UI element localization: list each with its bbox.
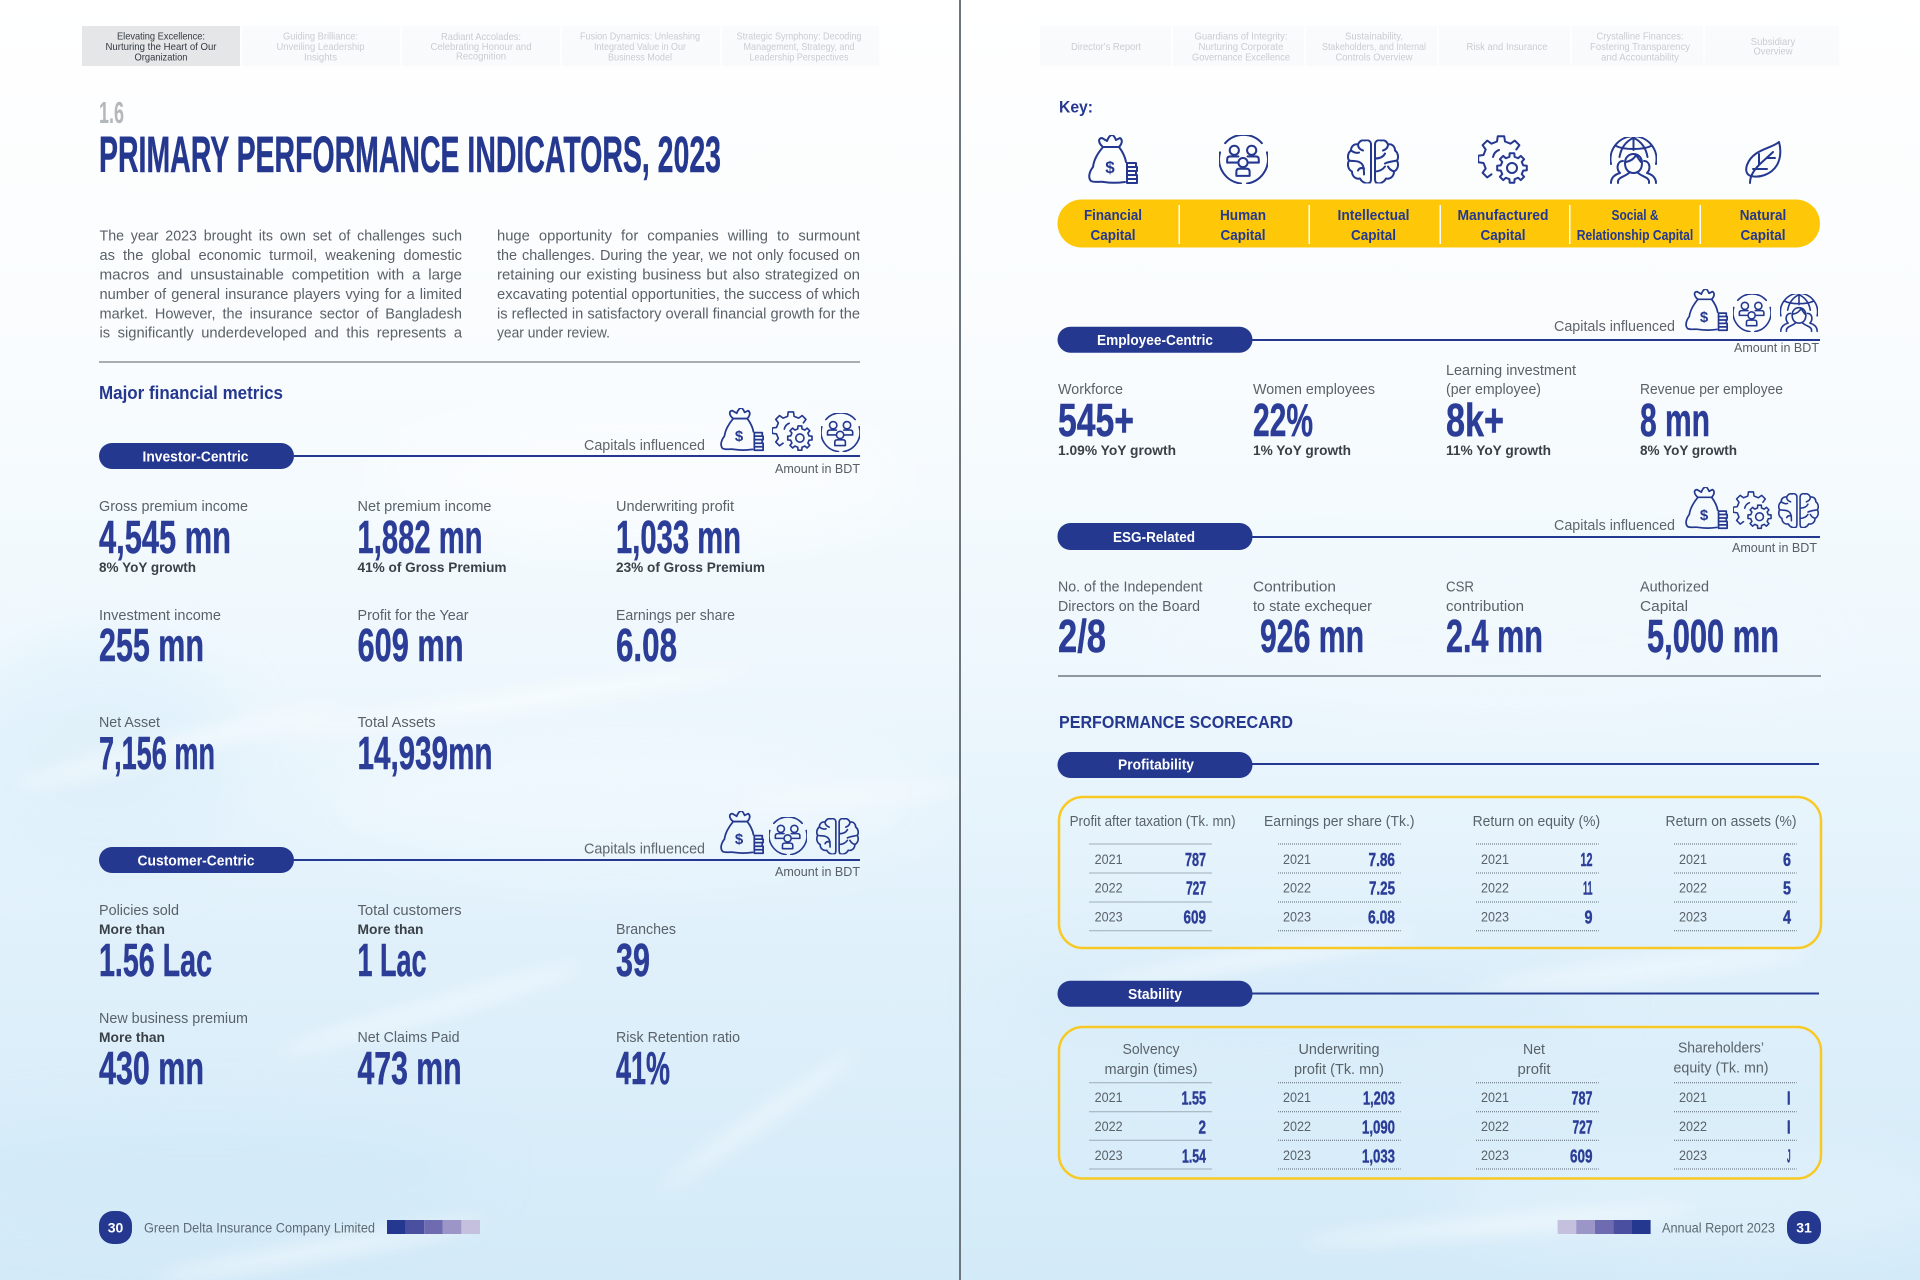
table: profit after taxation	[1070, 814, 1236, 931]
table: return on assets: 2023	[1679, 909, 1707, 924]
metric: investment income: Investment income	[99, 608, 221, 624]
navigation tabs: left page: Recognition	[456, 50, 506, 62]
metric: contribution to state exchequer	[1253, 580, 1372, 662]
metric: women employees	[1253, 382, 1375, 458]
navigation tabs: right page: and Accountability	[1601, 52, 1680, 64]
metrics: esg-related	[1058, 580, 1779, 662]
metric: independent directors: 2/8	[1058, 610, 1106, 662]
table: shareholders equity: I	[1787, 1088, 1790, 1108]
table: underwriting profit: 2023	[1283, 1148, 1311, 1163]
metric: contribution to state exchequer: 926 mn	[1260, 610, 1364, 662]
navigation tabs: left page: Radiant Accolades:	[441, 31, 521, 43]
metrics: employee-centric	[1058, 363, 1783, 458]
table: shareholders equity: Shareholders’	[1678, 1041, 1764, 1057]
metric: workforce	[1058, 382, 1176, 458]
metric: earnings per share	[616, 608, 735, 671]
legend: yellow capitals bar: Manufactured	[1458, 207, 1548, 224]
table: return on assets: 5	[1783, 879, 1791, 899]
navigation tabs: left page	[82, 26, 879, 66]
table: underwriting profit: 2022	[1283, 1119, 1311, 1134]
metric: net claims paid: 473 mn	[358, 1042, 462, 1094]
section header: esg-related: ESG-Related	[1113, 530, 1195, 546]
section header: employee-centric: Employee-Centric	[1097, 333, 1213, 349]
metric: csr contribution: contribution	[1446, 599, 1524, 615]
section header: stability	[1058, 981, 1819, 1007]
metric: revenue per employee: 8% YoY growth	[1640, 442, 1737, 458]
icon: social capital	[1780, 293, 1818, 331]
centre fold line	[959, 0, 961, 1280]
table: underwriting profit: 1,090	[1362, 1117, 1395, 1137]
metric: net premium income: Net premium income	[358, 499, 492, 515]
metric: authorized capital: 5,000 mn	[1647, 610, 1779, 662]
text block: introduction right column	[497, 228, 861, 342]
table: solvency margin: 2021	[1095, 1090, 1123, 1105]
metric: risk retention ratio	[616, 1030, 740, 1094]
metric: contribution to state exchequer: to state exchequer	[1253, 599, 1372, 615]
table: shareholders equity: 2022	[1679, 1119, 1707, 1134]
metric: net claims paid	[358, 1030, 462, 1094]
icon: manufactured capital	[1733, 492, 1771, 528]
navigation tabs: right page: Stakeholders, and Internal	[1322, 41, 1426, 53]
footer: left page: 30	[108, 1220, 123, 1236]
icon: financial capital	[721, 811, 763, 853]
table: return on assets: 4	[1783, 907, 1791, 927]
table: shareholders equity: 2021	[1679, 1090, 1707, 1105]
metric: learning investment: Learning investment	[1446, 363, 1576, 379]
table: net profit: 727	[1572, 1117, 1592, 1137]
metric: total assets: 14,939mn	[358, 727, 492, 779]
legend: yellow capitals bar: Intellectual	[1338, 207, 1410, 224]
table: profit after taxation: 2022	[1095, 881, 1123, 896]
icon: financial capital	[1686, 289, 1727, 330]
metric: total customers	[358, 903, 462, 986]
heading: key: Key:	[1059, 98, 1093, 117]
icon: financial capital: $	[1700, 309, 1709, 326]
navigation tabs: right page: Risk and Insurance	[1466, 41, 1548, 53]
section header: profitability	[1058, 752, 1819, 778]
text block: introduction right column: huge opportunity for companies willing to surmount	[497, 228, 861, 245]
panel: profitability scorecard	[1059, 797, 1821, 948]
section header: stability: Stability	[1128, 987, 1182, 1003]
navigation tabs: left page: Leadership Perspectives	[750, 52, 848, 64]
metric: profit for the year: Profit for the Year	[358, 608, 469, 624]
metric: underwriting profit: 23% of Gross Premium	[616, 559, 765, 575]
metric: earnings per share: 6.08	[616, 619, 677, 671]
icon: financial capital: $	[735, 831, 744, 848]
table: profit after taxation: Profit after taxation (Tk. mn)	[1070, 814, 1236, 830]
table: shareholders equity: equity (Tk. mn)	[1674, 1061, 1768, 1077]
title: PRIMARY PERFORMANCE INDICATORS, 2023	[99, 126, 721, 183]
table: net profit	[1476, 1042, 1599, 1169]
table: earnings per share: 2022	[1283, 881, 1311, 896]
legend: yellow capitals bar: Financial	[1084, 207, 1142, 224]
metric: revenue per employee	[1640, 382, 1783, 458]
legend: yellow capitals bar: Capital	[1351, 227, 1396, 244]
table: earnings per share: 7.86	[1368, 850, 1395, 870]
metric: gross premium income: Gross premium income	[99, 499, 248, 515]
metrics: investor-centric	[99, 499, 765, 779]
metric: workforce: Workforce	[1058, 382, 1123, 398]
metrics: customer-centric	[99, 903, 740, 1094]
navigation tabs: left page: Nurturing the Heart of Our	[106, 41, 217, 53]
navigation tabs: left page: Unveiling Leadership	[276, 41, 365, 53]
table: earnings per share: 6.08	[1368, 907, 1395, 927]
navigation tabs: left page: Organization	[134, 52, 188, 64]
table: net profit: 787	[1572, 1088, 1592, 1108]
icon: intellectual capital	[1779, 494, 1818, 528]
icon: financial capital: $	[735, 428, 744, 445]
metric: authorized capital: Authorized	[1640, 580, 1709, 596]
metric: risk retention ratio: Risk Retention ratio	[616, 1030, 740, 1046]
text block: introduction right column: is reflected in satisfactory overall financial growth for the	[497, 305, 860, 322]
table: return on equity: 11	[1583, 879, 1592, 899]
table: net profit: 2021	[1481, 1090, 1509, 1105]
icon: financial capital	[1686, 487, 1727, 528]
legend: yellow capitals bar: Capital	[1220, 227, 1266, 244]
navigation tabs: right page: Director's Report	[1071, 41, 1141, 53]
icon: financial capital	[1089, 135, 1137, 183]
metric: learning investment: (per employee)	[1446, 382, 1541, 398]
table: return on equity: 2021	[1481, 852, 1509, 867]
navigation tabs: right page: Governance Excellence	[1192, 52, 1290, 64]
section header: investor-centric: Capitals influenced	[584, 437, 705, 454]
metric: csr contribution	[1446, 580, 1543, 662]
metric: gross premium income: 8% YoY growth	[99, 559, 196, 575]
icon: intellectual capital	[1348, 140, 1398, 183]
table: shareholders equity: 2023	[1679, 1148, 1707, 1163]
icon: human capital	[1219, 135, 1268, 183]
section header: employee-centric	[1058, 289, 1820, 355]
navigation tabs: right page: Overview	[1754, 46, 1793, 58]
table: profit after taxation: 727	[1186, 879, 1206, 899]
icon: financial capital: $	[1700, 507, 1709, 524]
table: return on equity: 2023	[1481, 909, 1509, 924]
metric: branches	[616, 922, 676, 986]
metric: new business premium: New business premium	[99, 1011, 248, 1027]
icon: manufactured capital	[772, 412, 812, 450]
table: net profit: profit	[1518, 1062, 1550, 1078]
metric: women employees: 1% YoY growth	[1253, 442, 1351, 458]
table: net profit: Net	[1523, 1042, 1545, 1058]
metric: profit for the year	[358, 608, 469, 671]
navigation tabs: right page: Sustainability,	[1345, 30, 1403, 42]
table: shareholders equity	[1674, 1041, 1797, 1169]
metric: profit for the year: 609 mn	[358, 619, 464, 671]
table: underwriting profit: 1,033	[1362, 1146, 1395, 1166]
table: return on equity: 2022	[1481, 881, 1509, 896]
metric: total assets	[358, 715, 492, 779]
table: return on equity	[1473, 814, 1600, 931]
footer: right page: 31	[1796, 1220, 1812, 1236]
legend: capital icons	[1089, 135, 1780, 183]
table: return on assets: 2021	[1679, 852, 1707, 867]
icon: social capital	[1610, 136, 1656, 183]
navigation tabs: left page: Management, Strategy, and	[744, 41, 855, 53]
metric: policies sold	[99, 903, 212, 986]
table: earnings per share	[1264, 814, 1414, 931]
panel: left page	[82, 26, 879, 1244]
panel: right page	[1040, 26, 1839, 1244]
metric: net asset	[99, 715, 215, 779]
section header: customer-centric: Amount in BDT	[775, 864, 860, 879]
table: return on assets	[1666, 814, 1797, 931]
metric: new business premium	[99, 1011, 248, 1094]
table: earnings per share: 2021	[1283, 852, 1311, 867]
text block: introduction left column: is significantly underdeveloped and this represents a	[100, 325, 463, 342]
panel: stability scorecard	[1059, 1027, 1821, 1178]
text block: introduction left column: number of general insurance players vying for a limited	[100, 286, 462, 303]
table: return on equity: 9	[1584, 907, 1592, 927]
table: return on assets: 2022	[1679, 881, 1707, 896]
icon: human capital	[1733, 294, 1771, 332]
navigation tabs: left page: Insights	[304, 52, 337, 64]
text block: introduction right column: the challenges. During the year, we not only focused on	[497, 247, 860, 264]
table: return on assets: 6	[1783, 850, 1791, 870]
section header: investor-centric: Investor-Centric	[142, 450, 248, 466]
navigation tabs: right page: Subsidiary	[1751, 36, 1796, 48]
text block: introduction right column: retaining our existing business but also strategized on	[497, 266, 860, 284]
metric: investment income: 255 mn	[99, 619, 204, 671]
navigation tabs: left page: Integrated Value in Our	[594, 41, 686, 53]
section header: customer-centric: Customer-Centric	[138, 854, 254, 870]
section header: investor-centric: Amount in BDT	[775, 461, 860, 476]
metric: authorized capital: Capital	[1640, 599, 1688, 615]
section header: customer-centric	[99, 811, 860, 879]
table: underwriting profit: 1,203	[1363, 1088, 1395, 1108]
footer: left page	[99, 1211, 480, 1244]
metric: policies sold: More than	[99, 921, 165, 937]
legend: yellow capitals bar: Natural	[1740, 207, 1786, 224]
metric: women employees: 22%	[1253, 394, 1313, 446]
metric: net premium income	[358, 499, 506, 575]
metric: new business premium: 430 mn	[99, 1042, 204, 1094]
text block: introduction right column: excavating potential opportunities, the success of which	[497, 286, 860, 303]
table: earnings per share: Earnings per share (Tk.)	[1264, 814, 1414, 830]
metric: policies sold: 1.56 Lac	[99, 934, 212, 986]
table: underwriting profit: Underwriting	[1298, 1042, 1380, 1058]
table: profit after taxation: 2021	[1095, 852, 1123, 867]
text block: introduction left column: as the global economic turmoil, weakening domestic	[100, 247, 462, 264]
footer: right page	[1558, 1211, 1821, 1244]
text block: introduction left column: The year 2023 brought its own set of challenges such	[100, 228, 462, 245]
icon: human capital	[821, 413, 860, 452]
metric: earnings per share: Earnings per share	[616, 608, 735, 624]
metric: learning investment: 11% YoY growth	[1446, 442, 1551, 458]
navigation tabs: left page: Strategic Symphony: Decoding	[736, 30, 862, 42]
heading: performance scorecard: PERFORMANCE SCORECARD	[1059, 712, 1293, 732]
table: solvency margin: 2	[1198, 1117, 1206, 1137]
table: net profit: 609	[1570, 1146, 1592, 1166]
metric: revenue per employee: 8 mn	[1640, 394, 1710, 446]
metric: total customers: 1 Lac	[358, 934, 426, 986]
table: underwriting profit: profit (Tk. mn)	[1294, 1062, 1384, 1078]
icon: intellectual capital	[817, 819, 858, 854]
section header: esg-related: Amount in BDT	[1732, 540, 1817, 555]
legend: yellow capitals bar: Capital	[1480, 227, 1526, 244]
icon: human capital	[769, 817, 807, 855]
table: net profit: 2023	[1481, 1148, 1509, 1163]
table: profit after taxation: 787	[1185, 850, 1206, 870]
metric: underwriting profit: 1,033 mn	[616, 511, 741, 563]
metric: independent directors	[1058, 580, 1202, 662]
section header: customer-centric: Capitals influenced	[584, 840, 705, 858]
metric: independent directors: No. of the Independent	[1058, 580, 1202, 596]
table: net profit: 2022	[1481, 1119, 1509, 1134]
metric: workforce: 1.09% YoY growth	[1058, 442, 1176, 458]
metric: contribution to state exchequer: Contribution	[1253, 580, 1336, 596]
navigation tabs: left page: Elevating Excellence:	[117, 30, 205, 42]
metric: branches: 39	[616, 934, 650, 986]
table: shareholders equity: I	[1787, 1117, 1790, 1137]
table: solvency margin: Solvency	[1122, 1042, 1180, 1058]
metric: policies sold: Policies sold	[99, 903, 179, 919]
table: earnings per share: 7.25	[1369, 879, 1395, 899]
metric: women employees: Women employees	[1253, 382, 1375, 398]
legend: yellow capitals bar: Human	[1220, 207, 1266, 224]
metric: gross premium income	[99, 499, 248, 575]
legend: yellow capitals bar: Capital	[1740, 227, 1786, 244]
footer: right page: Annual Report 2023	[1662, 1221, 1775, 1236]
metric: underwriting profit	[616, 499, 765, 575]
icon: manufactured capital	[1478, 136, 1527, 183]
table: underwriting profit	[1278, 1042, 1401, 1169]
table: underwriting profit: 2021	[1283, 1090, 1311, 1105]
text block: introduction left column: macros and unsustainable competition with a large	[100, 266, 462, 284]
table: solvency margin: 2022	[1095, 1119, 1123, 1134]
section header: employee-centric: Amount in BDT	[1734, 340, 1819, 355]
text block: introduction left column: market. However, the insurance sector of Bangladesh	[100, 305, 462, 322]
table: solvency margin: 1.54	[1182, 1146, 1206, 1166]
icon: natural capital	[1746, 142, 1780, 183]
metric: underwriting profit: Underwriting profit	[616, 499, 734, 515]
legend: yellow capitals bar: Relationship Capital	[1577, 227, 1693, 244]
metric: net claims paid: Net Claims Paid	[358, 1030, 460, 1046]
icon: financial capital: $	[1105, 158, 1115, 177]
section header: esg-related: Capitals influenced	[1554, 517, 1675, 534]
navigation tabs: left page: Business Model	[608, 52, 672, 64]
text block: introduction right column: year under review.	[497, 325, 610, 342]
metric: authorized capital	[1640, 580, 1779, 662]
icon: financial capital	[721, 408, 763, 450]
section header: investor-centric	[99, 408, 860, 476]
table: solvency margin: 1.55	[1182, 1088, 1206, 1108]
legend: yellow capitals bar	[1058, 200, 1820, 248]
metric: learning investment: 8k+	[1446, 394, 1504, 446]
metric: net premium income: 41% of Gross Premium	[358, 559, 506, 575]
metric: learning investment	[1446, 363, 1576, 458]
metric: risk retention ratio: 41%	[616, 1042, 670, 1094]
metric: new business premium: More than	[99, 1029, 165, 1045]
metric: net asset: Net Asset	[99, 715, 160, 731]
metric: csr contribution: 2.4 mn	[1446, 610, 1543, 662]
metric: gross premium income: 4,545 mn	[99, 511, 231, 563]
navigation tabs: left page: Guiding Brilliance:	[283, 30, 358, 42]
metric: csr contribution: CSR	[1446, 580, 1474, 596]
metric: net premium income: 1,882 mn	[358, 511, 482, 563]
table: solvency margin	[1090, 1042, 1212, 1169]
navigation tabs: right page: Fostering Transparency	[1590, 41, 1691, 53]
navigation tabs: right page: Nurturing Corporate	[1198, 41, 1284, 53]
navigation tabs: left page: Fusion Dynamics: Unleashing	[580, 30, 700, 42]
legend: yellow capitals bar: Capital	[1090, 227, 1136, 244]
table: return on equity: 12	[1580, 850, 1592, 870]
legend: yellow capitals bar: Social &	[1612, 207, 1659, 224]
section number: 1.6	[99, 95, 124, 130]
table: profit after taxation: 2023	[1095, 909, 1123, 924]
metric: total assets: Total Assets	[358, 715, 436, 731]
metric: total customers: More than	[358, 921, 424, 937]
metric: revenue per employee: Revenue per employee	[1640, 382, 1783, 398]
table: return on assets: Return on assets (%)	[1666, 814, 1796, 830]
table: solvency margin: margin (times)	[1104, 1062, 1198, 1078]
text block: introduction left column	[100, 228, 463, 342]
metric: branches: Branches	[616, 922, 676, 938]
metric: investment income	[99, 608, 221, 671]
section header: employee-centric: Capitals influenced	[1554, 318, 1675, 335]
metric: workforce: 545+	[1058, 394, 1134, 446]
navigation tabs: right page: Crystalline Finances:	[1596, 30, 1684, 42]
navigation tabs: left page: Celebrating Honour and	[430, 41, 532, 53]
table: solvency margin: 2023	[1095, 1148, 1123, 1163]
table: profit after taxation: 609	[1184, 907, 1206, 927]
metric: total customers: Total customers	[358, 903, 462, 919]
table: return on equity: Return on equity (%)	[1473, 814, 1600, 830]
navigation tabs: right page: Controls Overview	[1336, 52, 1413, 64]
footer: left page: Green Delta Insurance Company Limited	[144, 1221, 375, 1236]
heading: major financial metrics: Major financial metrics	[99, 383, 283, 403]
metric: net asset: 7,156 mn	[99, 727, 215, 779]
table: shareholders equity: J	[1787, 1146, 1790, 1166]
navigation tabs: right page: Guardians of Integrity:	[1194, 30, 1288, 42]
section header: esg-related	[1058, 487, 1820, 555]
metric: independent directors: Directors on the Board	[1058, 599, 1200, 615]
section header: profitability: Profitability	[1118, 758, 1194, 774]
table: earnings per share: 2023	[1283, 909, 1311, 924]
navigation tabs: right page	[1040, 26, 1839, 66]
